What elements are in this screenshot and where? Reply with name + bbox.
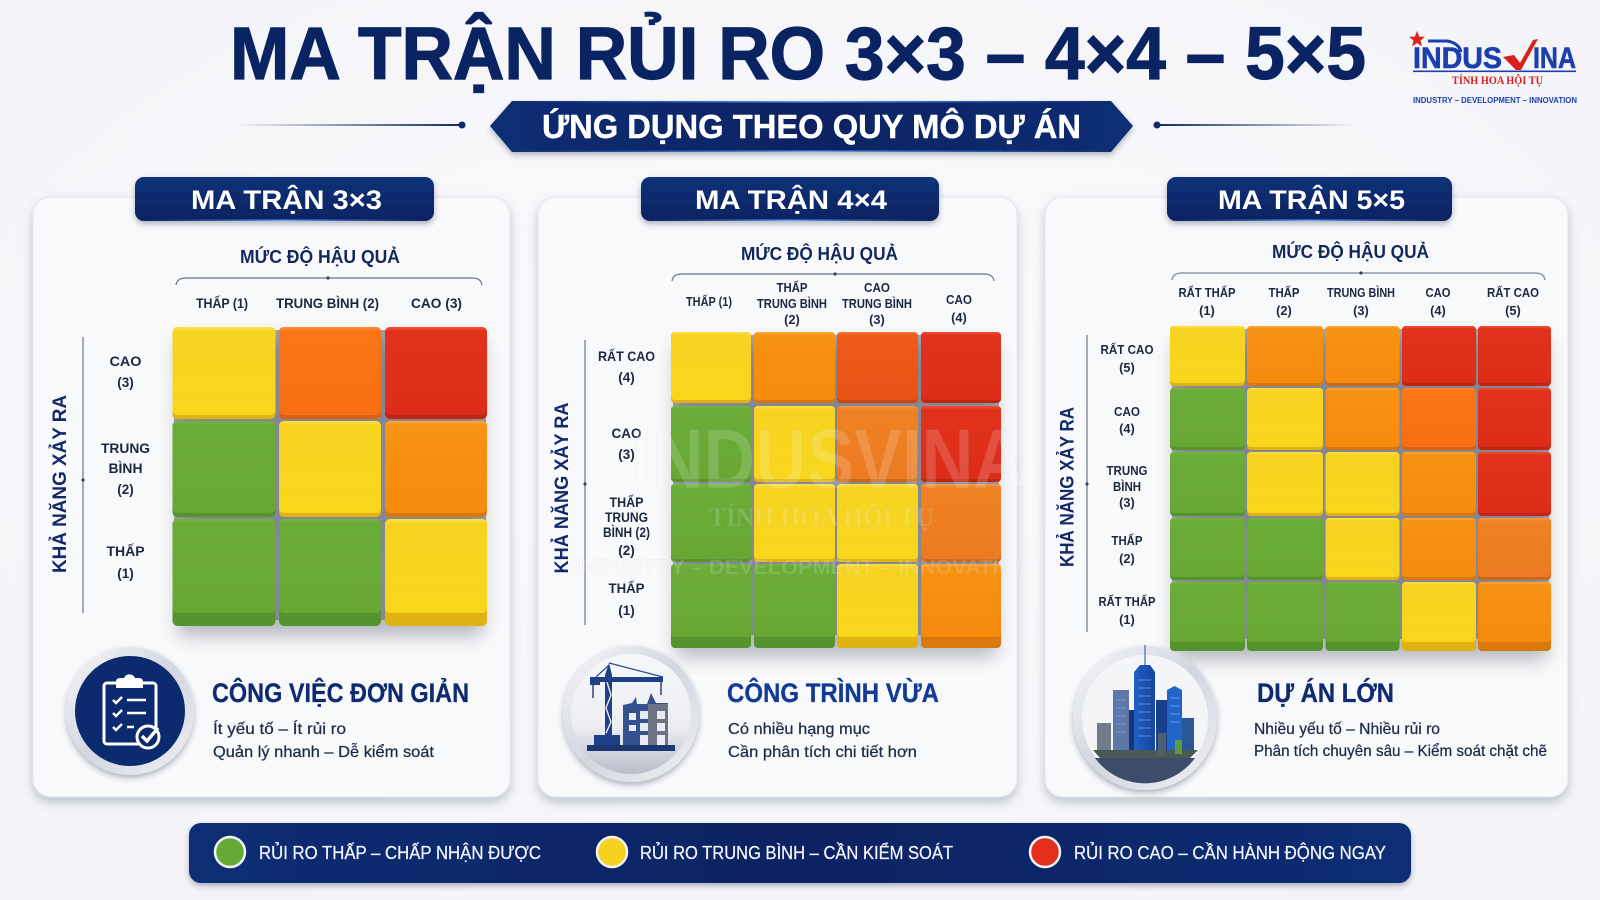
axis line: likelihood	[81, 337, 85, 613]
row labels: TRUNG	[101, 441, 150, 456]
caption: simple work: Quản lý nhanh – Dễ kiểm soát	[213, 742, 435, 761]
row labels: THẤP	[608, 581, 644, 596]
column labels	[196, 296, 462, 311]
row labels: (2)	[1119, 551, 1135, 566]
column labels: CAO	[1426, 285, 1451, 300]
icon: construction crane and building	[563, 646, 699, 782]
column labels: THẤP (1)	[686, 294, 732, 309]
column labels: CAO	[946, 292, 972, 307]
row labels: (3)	[117, 375, 134, 390]
row labels: BÌNH	[1113, 479, 1141, 494]
row labels: THẤP	[1112, 533, 1143, 548]
column labels	[686, 280, 972, 327]
heading: MA TRẬN 5x5: MA TRẬN 5×5	[1218, 184, 1405, 215]
watermark: INDUSVINA	[632, 412, 1025, 506]
logo: INDUSVINA: INDUSTRY – DEVELOPMENT – INNOVATION	[1413, 96, 1577, 105]
caption: simple work	[212, 676, 469, 761]
row labels: CAO	[110, 354, 142, 369]
row labels: THẤP	[106, 544, 144, 559]
axis title: consequence: MỨC ĐỘ HẬU QUẢ	[741, 243, 898, 264]
legend: low risk	[215, 837, 541, 867]
column labels: TRUNG BÌNH	[1327, 285, 1395, 300]
axis bracket: consequence	[1172, 271, 1545, 280]
axis line: likelihood	[1085, 335, 1089, 632]
caption: large project: DỰ ÁN LỚN	[1257, 677, 1394, 708]
logo: INDUSVINA	[1409, 31, 1577, 105]
column labels: RẤT THẤP	[1178, 285, 1236, 300]
row labels: BÌNH (2)	[603, 525, 650, 540]
legend: low risk: RỦI RO THẤP – CHẤP NHẬN ĐƯỢC	[259, 842, 541, 863]
row labels: RẤT THẤP	[1098, 594, 1156, 609]
matrix grid 5x5	[1170, 326, 1551, 660]
column labels: THẤP	[1268, 285, 1300, 300]
row labels: (2)	[117, 482, 134, 497]
row labels: TRUNG	[1106, 463, 1148, 478]
heading: MA TRẬN 4x4	[641, 177, 939, 221]
row labels: (1)	[117, 566, 134, 581]
subtitle banner	[490, 101, 1133, 152]
legend: medium risk: RỦI RO TRUNG BÌNH – CẦN KIỂM SOÁT	[640, 842, 953, 863]
axis bracket: consequence	[176, 276, 482, 285]
axis title: likelihood: KHẢ NĂNG XẢY RA	[1056, 407, 1078, 567]
row labels	[1098, 342, 1156, 627]
row labels: CAO	[612, 426, 642, 441]
panel: matrix 5x5 card	[1045, 177, 1568, 797]
icon: clipboard checklist	[66, 647, 194, 775]
caption: simple work: CÔNG VIỆC ĐƠN GIẢN	[212, 676, 469, 708]
decorative line right of banner	[1154, 122, 1357, 128]
column labels: THẤP (1)	[196, 296, 248, 311]
row labels: BÌNH	[108, 461, 142, 476]
column labels: (1)	[1199, 303, 1215, 318]
logo: INDUSVINA: INDUS	[1413, 42, 1502, 75]
column labels: (2)	[784, 312, 800, 327]
axis bracket: consequence	[672, 272, 994, 281]
caption: large project: Nhiều yếu tố – Nhiều rủi ro	[1254, 721, 1440, 738]
row labels: RẤT CAO	[1100, 342, 1154, 357]
row labels: (5)	[1119, 360, 1135, 375]
caption: medium construction: Có nhiều hạng mục	[728, 721, 870, 738]
heading: MA TRẬN 4x4: MA TRẬN 4×4	[695, 184, 887, 215]
matrix grid 3x3	[172, 327, 487, 636]
column labels: RẤT CAO	[1487, 285, 1539, 300]
heading: MA TRẬN 3x3: MA TRẬN 3×3	[191, 184, 382, 215]
heading: MA TRẬN 5x5	[1167, 177, 1452, 221]
column labels: TRUNG BÌNH	[757, 296, 827, 311]
icon: skyscraper city	[1073, 645, 1217, 790]
panel: matrix 3x3 card	[33, 177, 510, 797]
column labels: (3)	[869, 312, 885, 327]
row labels	[598, 349, 655, 618]
column labels: (4)	[1430, 303, 1446, 318]
panel: matrix 4x4 card	[538, 177, 1031, 797]
legend: medium risk	[597, 837, 953, 867]
column labels: CAO (3)	[411, 296, 462, 311]
column labels: (4)	[951, 310, 967, 325]
matrix grid 4x4	[671, 332, 1001, 657]
axis title: likelihood: KHẢ NĂNG XẢY RA	[551, 402, 573, 574]
row labels: (4)	[1119, 421, 1135, 436]
row labels: THẤP	[610, 495, 644, 510]
row labels: CAO	[1114, 404, 1140, 419]
title: MA TRẬN RỦI RO 3×3 – 4×4 – 5×5	[230, 12, 1366, 95]
column labels: (3)	[1353, 303, 1369, 318]
axis title: likelihood: KHẢ NĂNG XẢY RA	[49, 395, 71, 573]
legend: high risk: RỦI RO CAO – CẦN HÀNH ĐỘNG NGAY	[1074, 842, 1386, 863]
caption: large project	[1254, 677, 1547, 760]
row labels: (4)	[618, 370, 635, 385]
logo: INDUSVINA: TÍNH HOA HỘI TỤ	[1452, 73, 1544, 87]
column labels: TRUNG BÌNH	[842, 296, 912, 311]
caption: medium construction: CÔNG TRÌNH VỪA	[727, 677, 939, 708]
row labels: TRUNG	[605, 510, 648, 525]
heading: MA TRẬN 3x3	[135, 177, 434, 221]
watermark	[575, 412, 1031, 579]
subtitle banner: ỨNG DỤNG THEO QUY MÔ DỰ ÁN	[542, 107, 1081, 145]
caption: large project: Phân tích chuyên sâu – Kiểm soát chặt chẽ	[1254, 742, 1547, 760]
column labels: (5)	[1505, 303, 1521, 318]
row labels: (2)	[618, 543, 635, 558]
axis title: consequence: MỨC ĐỘ HẬU QUẢ	[240, 246, 400, 267]
caption: medium construction	[727, 677, 939, 761]
caption: simple work: Ít yếu tố – Ít rủi ro	[213, 719, 346, 738]
column labels: (2)	[1276, 303, 1292, 318]
legend bar	[189, 823, 1411, 883]
decorative line left of banner	[235, 122, 466, 128]
row labels: RẤT CAO	[598, 349, 655, 364]
watermark: INDUSTRY – DEVELOPMENT – INNOVATION	[575, 556, 1031, 579]
logo: INDUSVINA: INA	[1533, 42, 1576, 75]
caption: medium construction: Cần phân tích chi tiết hơn	[728, 744, 917, 761]
column labels: TRUNG BÌNH (2)	[276, 296, 379, 311]
row labels	[101, 354, 150, 581]
column labels: CAO	[864, 280, 890, 295]
axis line: likelihood	[583, 340, 587, 625]
row labels: (3)	[1119, 495, 1135, 510]
row labels: (1)	[1119, 612, 1135, 627]
column labels: THẤP	[776, 280, 808, 295]
row labels: (1)	[618, 603, 635, 618]
column labels	[1178, 285, 1539, 318]
row labels: (3)	[618, 447, 635, 462]
watermark: TÍNH HOA HỘI TỤ	[709, 503, 934, 532]
legend: high risk	[1030, 837, 1386, 867]
axis title: consequence: MỨC ĐỘ HẬU QUẢ	[1272, 241, 1429, 262]
